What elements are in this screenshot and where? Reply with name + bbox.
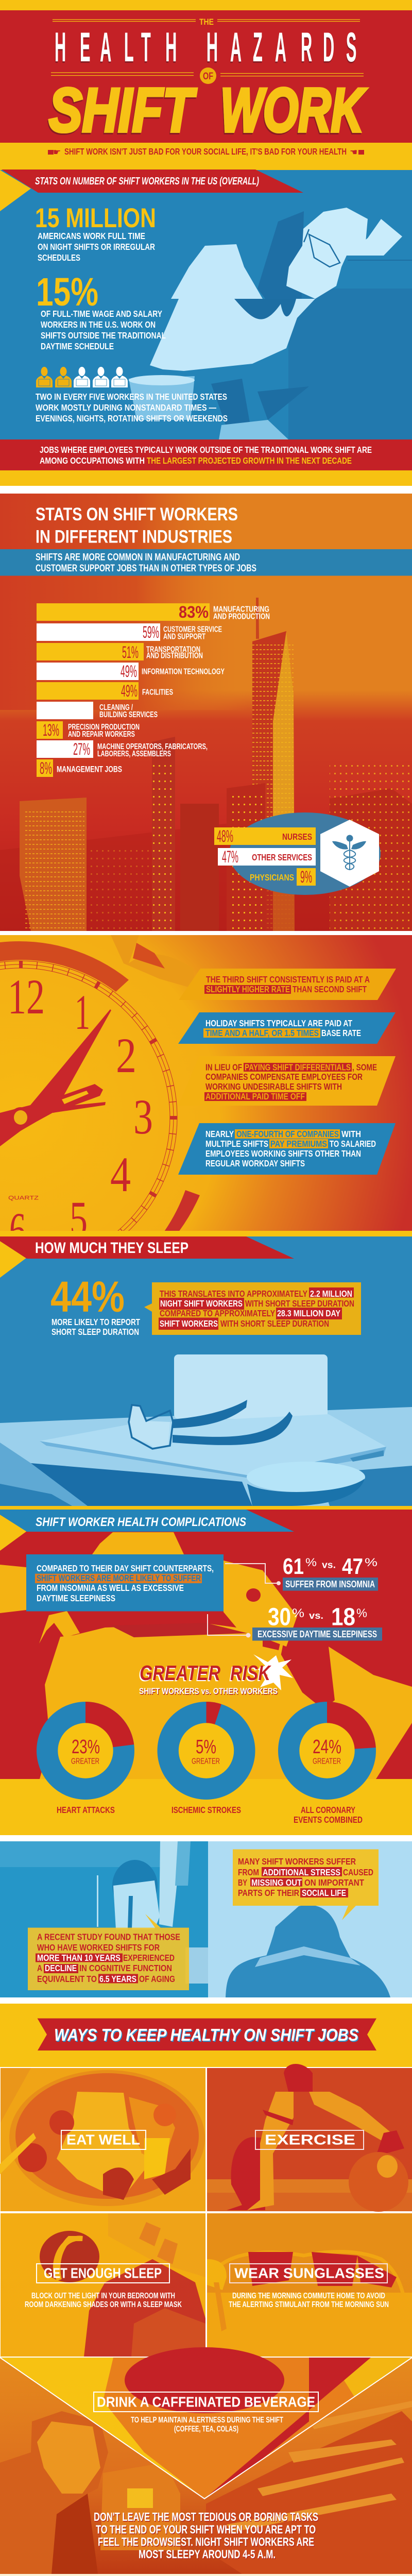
panel: exercise [207,2064,412,2212]
label: caffeine: TO HELP MAINTAIN ALERTNESS DURING THE SHIFT [131,2416,283,2425]
stat: 15 million: 15 MILLION [35,203,156,233]
stat: insomnia [283,1554,378,1591]
donut: all coronary events: GREATER [313,1757,341,1766]
photo: man rubbing eyes [0,1841,208,1984]
bar: transportation: 51% [122,643,139,662]
title: HEALTH HAZARDS [55,24,356,70]
text box: compared to day shift [26,1554,224,1612]
donut: heart attacks [37,1702,134,1815]
callout: social life: ON IMPORTANT [304,1877,364,1888]
text: tedious tasks [94,2510,318,2561]
photo: laptop and glasses [0,1354,412,1506]
bar: transportation: TRANSPORTATION [146,645,200,654]
donut: heart attacks: 23% [72,1736,100,1758]
donut: ischemic strokes: 5% [196,1736,216,1758]
stat: 15 percent: DAYTIME SCHEDULE [41,341,114,351]
label [25,2264,182,2309]
callout: holiday shifts [178,1012,396,1044]
photo: clock: QUARTZ [8,1195,39,1201]
bar: information technology: 49% [121,662,137,681]
callout: premiums: NEARLY [205,1129,234,1139]
title: THE [199,17,214,27]
bar: precision production: PRECISION PRODUCTION [68,723,140,732]
heading [36,504,238,547]
bar: machine operators: MACHINE OPERATORS, FABRICATORS, [97,742,208,751]
panel: risk donuts [0,1702,412,1835]
callout: social life: MISSING OUT [251,1877,302,1888]
panel: healthcare shift stats [214,812,381,895]
bar: nurses: 48% [217,827,233,845]
donut: heart attacks: GREATER [71,1757,99,1766]
label: ROOM DARKENING SHADES OR WITH A SLEEP MASK [25,2300,182,2309]
bar: transportation [37,643,203,662]
photo: tired woman at desk [129,208,412,439]
bar: physicians [250,868,316,886]
bar chart: industries [37,603,270,777]
bar: manufacturing: 83% [179,603,209,621]
callout: paid time off: COMPANIES COMPENSATE EMPLOYEES FOR [205,1072,363,1082]
photo: clock: 3 [133,1089,153,1144]
donut: all coronary events: EVENTS COMBINED [294,1815,363,1825]
panel: eat well [0,2068,205,2211]
label [229,2264,389,2309]
callout: third shift: SLIGHTLY HIGHER RATE [206,984,290,994]
callout: premiums: MULTIPLE SHIFTS [205,1139,268,1149]
bar: other services: 47% [222,848,238,866]
bar: cleaning [37,702,158,719]
label: caffeine: DRINK A CAFFEINATED BEVERAGE [97,2394,315,2410]
photo: exhausted worker [0,1532,412,1779]
bar: customer service: 59% [143,623,159,641]
photo: clock [0,935,200,1231]
bar: transportation: AND DISTRIBUTION [146,652,203,660]
stat: excessive sleepiness: vs. [309,1611,323,1621]
callout: cognitive decline: WHO HAVE WORKED SHIFTS FOR [37,1942,160,1953]
photo: clock: 5 [70,1191,88,1246]
bar: machine operators: 27% [73,740,90,758]
callout: social life: SOCIAL LIFE [302,1888,346,1898]
callout band: largest projected growth: AMONG OCCUPATIONS WITH [40,455,145,466]
text: tedious tasks: FEEL THE DROWSIEST. NIGHT SHIFT WORKERS ARE [98,2535,314,2548]
callout: social life: PARTS OF THEIR [238,1888,299,1898]
panel: health complications [0,1510,412,1779]
bar: cleaning: BUILDING SERVICES [99,710,158,719]
callout: cognitive decline: 6.5 YEARS [99,1974,136,1984]
stat: 15 million: AMERICANS WORK FULL TIME [38,231,145,241]
callout band: largest projected growth: THE LARGEST PROJECTED GROWTH IN THE NEXT DECADE [147,455,352,466]
text: tedious tasks: MOST SLEEPY AROUND 4-5 A.M. [139,2547,276,2561]
bar: manufacturing: AND PRODUCTION [213,612,270,621]
text box: compared to day shift: DAYTIME SLEEPINESS [37,1593,115,1603]
photo: city skyline [0,598,412,931]
stat: 44 percent: 44% [50,1273,125,1321]
stat: excessive sleepiness [252,1603,382,1640]
callout: premiums: ONE-FOURTH OF COMPANIES [236,1129,339,1139]
panel: cognitive decline photo [0,1841,208,1997]
callout: paid time off: WORKING UNDESIRABLE SHIFTS WITH [205,1081,342,1092]
callout: cognitive decline: A RECENT STUDY FOUND THAT THOSE [37,1932,180,1942]
callout: sleep duration: SHIFT WORKERS [160,1318,218,1329]
callout: paid time off: , SOME [352,1062,377,1072]
callout: cognitive decline [28,1914,189,1990]
label [255,2130,364,2149]
callout: sleep duration: WITH SHORT SLEEP DURATION [220,1318,329,1329]
subtitle: ☛ [53,147,61,158]
callout: premiums: WITH [341,1129,361,1139]
donut: ischemic strokes: ISCHEMIC STROKES [171,1805,241,1815]
callout: holiday shifts: TIME AND A HALF, OR 1.5 TIMES [205,1028,319,1038]
callout: paid time off [178,1056,396,1106]
callout: premiums: TO SALARIED [330,1139,376,1149]
callout: social life: ADDITIONAL STRESS [263,1867,340,1877]
photo: clock: 6 [9,1202,26,1258]
subheading band [0,549,412,576]
callout: paid time off: IN LIEU OF [205,1062,242,1072]
callout: third shift: THAN SECOND SHIFT [293,984,367,994]
bar: precision production [37,721,140,739]
text box: compared to day shift: FROM INSOMNIA AS WELL AS EXCESSIVE [37,1583,184,1593]
stat: insomnia: % [305,1556,317,1569]
heading: ways to keep healthy: WAYS TO KEEP HEALTHY ON SHIFT JOBS [54,2025,358,2044]
callout: cognitive decline: MORE THAN 10 YEARS [37,1953,121,1963]
photo: coffee cup in diamond [0,2347,412,2499]
callout: third shift [179,969,396,1000]
bar: information technology: INFORMATION TECHNOLOGY [142,668,225,676]
bar: facilities: 49% [121,682,138,700]
label: WEAR SUNGLASSES [234,2265,384,2281]
bar: management: 8% [40,759,52,777]
heading: greater risk [139,1661,278,1696]
text: tedious tasks: DON'T LEAVE THE MOST TEDIOUS OR BORING TASKS [94,2510,318,2523]
donut: all coronary events: 24% [313,1736,341,1758]
callout: sleep duration: 28.3 MILLION DAY [277,1308,340,1318]
callout: social life: CAUSED [343,1867,373,1877]
callout: cognitive decline: OF AGING [139,1974,175,1984]
photo: sleeping person [40,2213,205,2357]
panel: get enough sleep [1,2213,205,2357]
stat: excessive sleepiness: EXCESSIVE DAYTIME SLEEPINESS [258,1629,377,1639]
bar: other services: OTHER SERVICES [252,852,312,862]
callout: social life: BY [238,1877,247,1888]
text: two in five workers [36,392,228,423]
donut: heart attacks: HEART ATTACKS [57,1805,115,1815]
callout: premiums: EMPLOYEES WORKING SHIFTS OTHER THAN [205,1148,361,1159]
subtitle: ☚ [350,147,357,158]
callout: third shift: THE THIRD SHIFT CONSISTENTLY IS PAID AT A [206,974,370,985]
stat: insomnia: 47 [342,1554,363,1579]
bar: precision production: 13% [43,721,59,739]
banner heading: HOW MUCH THEY SLEEP [35,1240,188,1257]
heading: IN DIFFERENT INDUSTRIES [36,527,232,547]
callout: social life: FROM [238,1867,259,1877]
label: caffeine: (COFFEE, TEA, COLAS) [174,2425,238,2434]
header band [0,0,412,170]
photo: salad bowl [0,2068,205,2211]
callout: paid time off: ADDITIONAL PAID TIME OFF [205,1091,305,1101]
title [49,17,366,145]
bar: manufacturing [37,603,270,621]
panel: shift pay with clock photo [0,935,412,1231]
callout: social life: MANY SHIFT WORKERS SUFFER [238,1856,356,1867]
stat: insomnia: 61 [283,1554,304,1579]
bar: nurses [214,827,316,845]
stat: insomnia: SUFFER FROM INSOMNIA [285,1579,375,1589]
stat: excessive sleepiness: 30 [268,1603,291,1631]
icon: caduceus in hexagon [320,820,379,887]
icon: starburst [253,1654,293,1690]
callout: cognitive decline: EXPERIENCED [123,1953,175,1963]
photo: woman on exercise ball [207,2064,412,2212]
bar: physicians: PHYSICIANS [250,872,294,883]
bar: information technology [37,662,225,681]
stat: excessive sleepiness: % [356,1606,367,1620]
label: GET ENOUGH SLEEP [44,2265,162,2281]
callout: cognitive decline: A [37,1963,42,1973]
bar: customer service: CUSTOMER SERVICE [163,625,222,634]
photo: man among paperwork [0,2401,412,2574]
title: WORK [220,76,366,145]
panel: social life stress photo [208,1841,412,1997]
connector arrows [208,1564,280,1637]
callout: sleep duration: WITH SHORT SLEEP DURATION [245,1298,354,1309]
callout: paid time off: PAYING SHIFT DIFFERENTIALS [245,1062,351,1072]
stat: 15 percent [36,270,166,351]
stat: 15 million: SCHEDULES [38,252,80,263]
callout: cognitive decline: EQUIVALENT TO [37,1974,97,1984]
heading: greater risk: RISK [230,1661,272,1685]
stat: 15 percent: SHIFTS OUTSIDE THE TRADITIONAL [41,330,166,341]
banner heading [0,1236,294,1259]
callout: cognitive decline: IN COGNITIVE FUNCTION [79,1963,172,1973]
bar: physicians: 9% [300,868,312,886]
stat: 15 million: ON NIGHT SHIFTS OR IRREGULAR [38,242,155,252]
stat: 44 percent: MORE LIKELY TO REPORT [52,1317,140,1327]
bar: customer service: AND SUPPORT [163,633,205,641]
callout: sleep duration: THIS TRANSLATES INTO APPROXIMATELY [160,1289,307,1299]
donut: all coronary events: ALL CORONARY [301,1805,355,1815]
heading: greater risk: GREATER [140,1661,220,1685]
text: two in five workers: WORK MOSTLY DURING NONSTANDARD TIMES — [36,402,216,413]
panel: how much they sleep [0,1236,412,1506]
callout: holiday shifts: BASE RATE [321,1028,361,1038]
panel: caffeine and tedious tasks [0,2347,412,2574]
label: EAT WELL [66,2132,140,2147]
panel: wear sunglasses [207,2213,412,2357]
callout: premiums [178,1123,396,1175]
bar: facilities [37,682,173,700]
panel: overall stats with woman photo [0,170,412,439]
stat: insomnia: % [365,1556,377,1569]
stat: 15 million [35,203,156,263]
label: caffeine [94,2392,318,2434]
text: tedious tasks: TO THE END OF YOUR SHIFT WHEN YOU ARE APT TO [96,2522,316,2536]
callout: cognitive decline: DECLINE [45,1963,77,1973]
heading: ways to keep healthy [0,2004,412,2067]
banner heading [0,1510,294,1532]
callout: premiums: PAY PREMIUMS [270,1139,327,1149]
donut: ischemic strokes [158,1702,255,1815]
stat: 15 percent: WORKERS IN THE U.S. WORK ON [41,319,156,330]
bar: management [37,759,122,777]
bar: management: MANAGEMENT JOBS [57,765,122,774]
banner heading [2,170,303,193]
text box: compared to day shift: COMPARED TO THEIR DAY SHIFT COUNTERPARTS, [37,1563,214,1573]
stat: insomnia: vs. [322,1560,336,1570]
donut: ischemic strokes: GREATER [192,1757,220,1766]
bar: machine operators [37,740,208,758]
bar: customer service [37,623,222,641]
banner heading: STATS ON NUMBER OF SHIFT WORKERS IN THE US (OVERALL) [35,176,259,187]
panel: stats by industry [0,494,412,931]
bar: precision production: AND REPAIR WORKERS [68,730,135,739]
text: two in five workers: EVENINGS, NIGHTS, ROTATING SHIFTS OR WEEKENDS [36,413,228,423]
callout: sleep duration: 2.2 MILLION [310,1289,352,1299]
text: two in five workers: TWO IN EVERY FIVE WORKERS IN THE UNITED STATES [36,392,227,402]
text box: compared to day shift: SHIFT WORKERS ARE MORE LIKELY TO SUFFER [37,1573,201,1583]
callout band: largest projected growth [0,439,412,494]
stat: 15 percent: OF FULL-TIME WAGE AND SALARY [41,309,162,319]
callout: premiums: REGULAR WORKDAY SHIFTS [205,1158,305,1168]
donut: all coronary events [278,1702,376,1825]
stat: excessive sleepiness: % [292,1606,304,1620]
heading: STATS ON SHIFT WORKERS [36,504,238,524]
bar: manufacturing: MANUFACTURING [213,605,269,614]
title: SHIFT [49,76,197,145]
bar: cleaning: CLEANING / [99,703,133,712]
photo: clock: 12 [8,969,45,1024]
bar: nurses: NURSES [282,832,312,842]
subheading band: CUSTOMER SUPPORT JOBS THAN IN OTHER TYPES OF JOBS [36,563,256,574]
subheading band: SHIFTS ARE MORE COMMON IN MANUFACTURING AND [36,552,240,563]
bar: machine operators: LABORERS, ASSEMBLERS [97,750,171,758]
icons: two in five workers [36,367,128,387]
stat: 44 percent: SHORT SLEEP DURATION [52,1327,139,1337]
callout: social life [233,1850,379,1920]
callout: holiday shifts: HOLIDAY SHIFTS TYPICALLY ARE PAID AT [205,1018,352,1028]
photo: clock: 1 [75,985,90,1040]
callout: sleep duration [144,1282,361,1335]
title: OF [203,71,213,82]
callout: sleep duration: COMPARED TO APPROXIMATELY [160,1308,275,1318]
banner heading: SHIFT WORKER HEALTH COMPLICATIONS [36,1515,246,1529]
photo: clock: 4 [110,1147,131,1202]
label: EXERCISE [265,2132,355,2147]
stat: excessive sleepiness: 18 [331,1603,355,1631]
label: BLOCK OUT THE LIGHT IN YOUR BEDROOM WITH [31,2292,175,2300]
heading: greater risk: SHIFT WORKERS vs. OTHER WORKERS [139,1686,278,1696]
photo: woman from behind [226,1905,390,1997]
bar: other services [218,848,316,866]
photo: sunglasses [207,2251,407,2331]
bar: facilities: FACILITIES [142,688,173,697]
stat: 15 percent: 15% [36,270,98,314]
photo: clock: 2 [116,1028,136,1083]
callout: sleep duration: NIGHT SHIFT WORKERS [160,1298,243,1309]
